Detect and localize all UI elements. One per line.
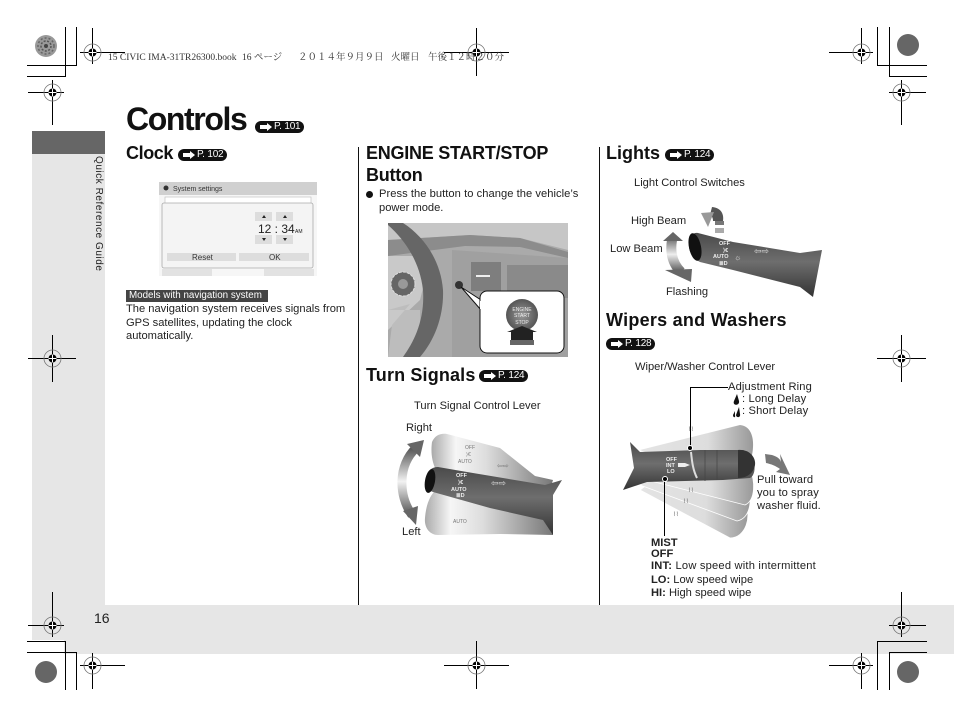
engine start description: Press the button to change the vehicle’s (379, 188, 578, 200)
lights lever illustration: ⇦⇨ (754, 246, 770, 256)
title: Controls (126, 101, 246, 137)
engine start description (366, 188, 578, 214)
adjustment ring legend: : Long Delay (742, 393, 806, 405)
print header line (108, 52, 504, 63)
wiper lever illustration: LO (667, 469, 675, 475)
wiper position legend: OFF (651, 548, 673, 560)
label: high beam: High Beam (631, 215, 686, 227)
wipers caption: Wiper/Washer Control Lever (635, 361, 775, 373)
turn signal lever illustration: ≣D (456, 489, 465, 499)
turn signal lever illustration: ⇦⇨ (497, 463, 509, 470)
clock description: GPS satellites, updating the clock (126, 316, 292, 328)
heading: clock: P. 102 (197, 149, 223, 160)
wiper lever illustration: INT (666, 463, 676, 469)
heading: turn signals: P. 124 (498, 370, 524, 381)
adjustment ring legend: : Short Delay (742, 405, 808, 417)
turn signal caption: Turn Signal Control Lever (414, 400, 541, 412)
heading: engine start/stop: ENGINE START/STOP (366, 143, 548, 163)
washer note: Pull toward (757, 474, 813, 486)
turn signal lever illustration: OFF (465, 445, 475, 451)
wiper position legend: HI: High speed wipe (651, 587, 751, 599)
adjustment ring legend: Adjustment Ring (728, 381, 812, 393)
wiper lever illustration: ⌇⌇ (688, 487, 694, 494)
turn signal lever illustration: AUTO (451, 487, 467, 493)
washer note: washer fluid. (757, 500, 821, 512)
turn signal lever illustration: ⟩€ (458, 479, 463, 486)
label: low beam: Low Beam (610, 243, 663, 255)
clock settings screen: Reset (192, 253, 214, 262)
clock settings screen: OK (269, 253, 281, 262)
turn signal lever illustration: AUTO (458, 459, 472, 465)
washer note (757, 474, 821, 512)
lights lever illustration: ⟩€ (723, 247, 728, 254)
heading: clock: Clock (126, 143, 173, 163)
heading: turn signals: Turn Signals (366, 365, 475, 385)
turn signal lever illustration: ⟩€ (466, 452, 471, 458)
wiper lever illustration: OFF (666, 457, 678, 463)
sidebar label: Quick Reference Guide (93, 156, 104, 272)
heading: clock (126, 143, 227, 163)
print header line: ２０１４年９月９日 (298, 53, 384, 63)
heading: lights (606, 143, 714, 163)
clock settings screen: System settings (173, 186, 223, 193)
wipers page reference: P. 128 (625, 338, 651, 349)
print header line: 火曜日 (391, 53, 420, 63)
engine start description: power mode. (379, 202, 443, 214)
turn signal lever illustration: AUTO (453, 519, 467, 525)
turn signal lever illustration: OFF (456, 473, 468, 479)
heading: lights: Lights (606, 143, 660, 163)
label: right: Right (406, 422, 432, 434)
lights lever illustration: ≣D (719, 257, 728, 267)
wiper position legend: LO: Low speed wipe (651, 574, 753, 586)
wiper position legend: MIST (651, 537, 678, 549)
adjustment ring legend (728, 381, 812, 417)
label: left: Left (402, 526, 421, 538)
clock settings screen: 12 : 34 (258, 222, 295, 236)
wiper lever illustration: ⌇⌇ (688, 426, 694, 433)
washer note: you to spray (757, 487, 819, 499)
title (126, 101, 304, 137)
navigation models tag: Models with navigation system (129, 290, 262, 301)
clock description: automatically. (126, 330, 193, 342)
clock description: The navigation system receives signals from (126, 303, 345, 315)
clock settings screen: AM (295, 229, 302, 235)
wiper lever illustration: ⌇⌇ (673, 511, 679, 518)
lights caption: Light Control Switches (634, 177, 745, 189)
wiper position legend: INT: Low speed with intermittent (651, 560, 816, 572)
print header line: 午後１２時２０分 (428, 53, 504, 63)
wiper position legend (651, 537, 816, 599)
print header line: 15 CIVIC IMA-31TR26300.book (108, 53, 237, 63)
dashboard illustration with engine start button: ENGINE (512, 307, 532, 313)
page number: 16 (94, 610, 110, 626)
clock description (126, 303, 345, 342)
heading: lights: P. 124 (684, 149, 710, 160)
lights lever illustration: OFF (719, 241, 731, 247)
heading: wipers and washers: Wipers and Washers (606, 310, 787, 330)
dashboard illustration with engine start button: START (514, 313, 530, 319)
print header line: 16 ページ (242, 53, 282, 63)
heading: turn signals (366, 365, 528, 385)
turn signal lever illustration: ⇦⇨ (491, 478, 507, 488)
heading: engine start/stop: Button (366, 165, 422, 185)
lights lever illustration: ☼ (734, 253, 741, 262)
lights lever illustration: AUTO (713, 254, 729, 260)
heading: engine start/stop (366, 143, 548, 185)
dashboard illustration with engine start button: STOP (515, 320, 529, 326)
wiper lever illustration: ⌇⌇ (683, 498, 689, 505)
title: P. 101 (274, 121, 300, 132)
label: flashing: Flashing (666, 286, 708, 298)
